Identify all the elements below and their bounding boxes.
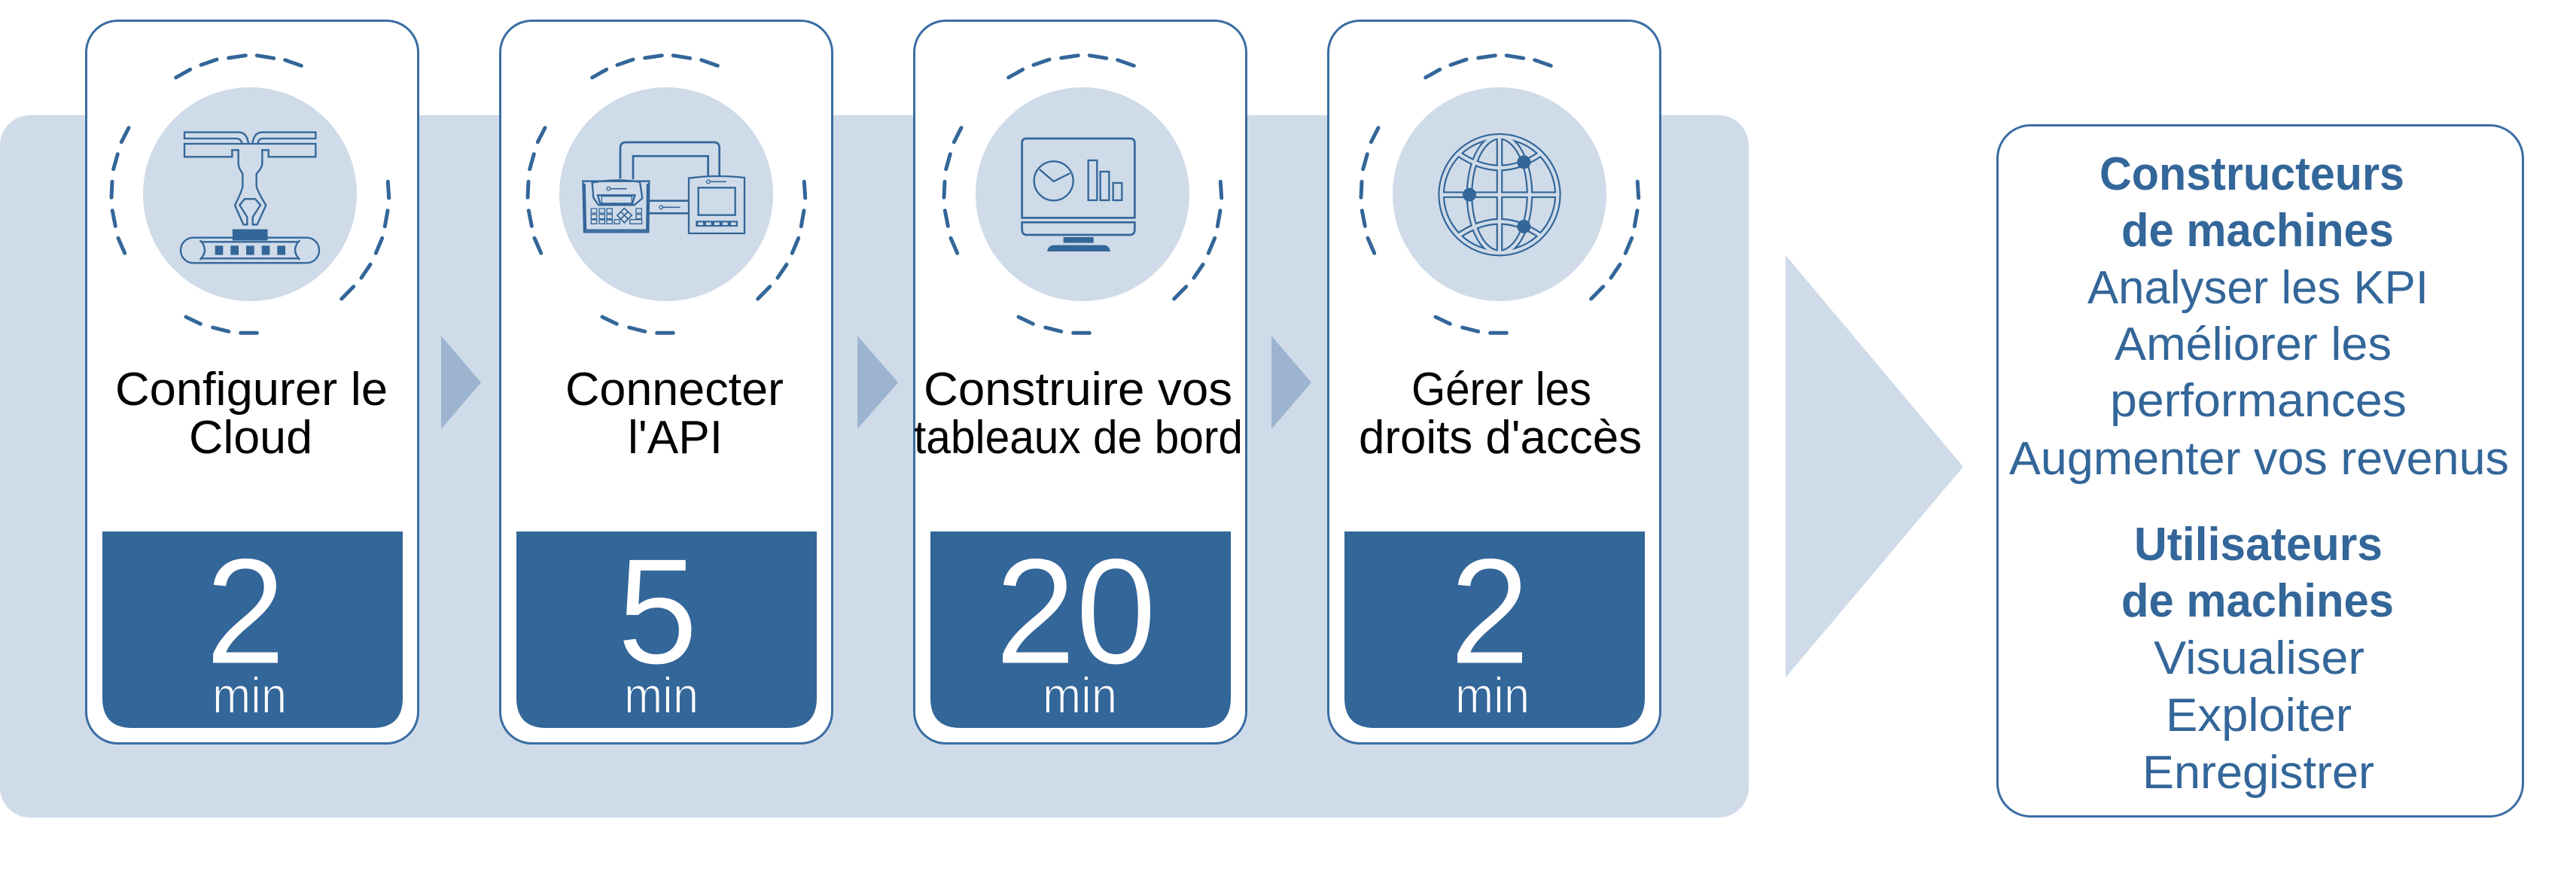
machine users heading [2121,519,2394,627]
icon circle 3 [976,87,1189,301]
machine users benefits [2142,632,2374,799]
machine builders benefits: Augmenter vos revenus [2009,433,2509,485]
step 1 card: configurer le cloud [86,21,419,744]
machine builders heading: de machines [2121,205,2394,257]
step 4 title [1359,364,1642,464]
step 2 title: Connecter [565,364,784,416]
step 1 title: Configurer le [115,364,388,416]
machine users heading: de machines [2121,575,2394,627]
step 4 time block: 2 [1450,528,1530,696]
machine builders heading [2099,148,2404,257]
arrow 2 [857,336,898,429]
step 3 time block: 20 [995,528,1156,696]
machine users benefits: Exploiter [2166,690,2352,742]
icon circle 4 [1393,87,1606,301]
step 1 time block: 2 [206,528,285,696]
arrow 1 [441,336,481,429]
dashed ring 4 [1361,56,1639,333]
machine builders heading: Constructeurs [2099,148,2404,200]
step 3 time block: min [1043,667,1117,724]
dashed ring 3 [944,56,1222,333]
icon: robot arm over conveyor [181,132,319,263]
step 3 title: Construire vos [924,364,1232,416]
step 3 title [914,364,1243,464]
step 4 title: Gérer les [1411,364,1591,416]
step 1 title [115,364,388,464]
background panel [0,115,1749,818]
step 3 card: construire vos tableaux de bord [914,21,1247,744]
large arrow [1786,255,1963,678]
machine users heading: Utilisateurs [2134,519,2383,571]
step 1 time block [102,528,403,728]
step 4 card: gerer les droits d'acces [1328,21,1661,744]
icon circle 2 [559,87,773,301]
icon: network globe [1442,136,1557,253]
dashed ring 1 [111,56,389,333]
dashed ring 2 [528,56,805,333]
step 1 title: Cloud [189,412,312,464]
machine builders benefits: Améliorer les [2115,318,2392,370]
machine builders benefits [2009,262,2509,485]
step 2 time block: min [624,667,699,724]
machine builders benefits: performances [2110,375,2407,427]
step 4 time block [1344,528,1645,728]
step 4 time block: min [1455,667,1530,724]
step 2 title: l'API [628,412,723,464]
step 2 title [565,364,784,464]
machine users benefits: Enregistrer [2142,747,2374,799]
step 2 time block: 5 [617,528,698,696]
machine builders benefits: Analyser les KPI [2087,262,2428,314]
step 1 time block: min [212,667,287,724]
icon circle 1 [143,87,357,301]
machine users benefits: Visualiser [2154,632,2364,684]
icon: monitor with charts [1022,139,1134,251]
arrow 3 [1271,336,1311,429]
step 2 card: connecter l'API [500,21,833,744]
step 2 time block [516,528,817,728]
benefits panel [1998,125,2523,816]
step 3 title: tableaux de bord [914,412,1243,464]
icon: connected control devices [583,142,744,233]
step 3 time block [930,528,1231,728]
step 4 title: droits d'accès [1359,412,1642,464]
